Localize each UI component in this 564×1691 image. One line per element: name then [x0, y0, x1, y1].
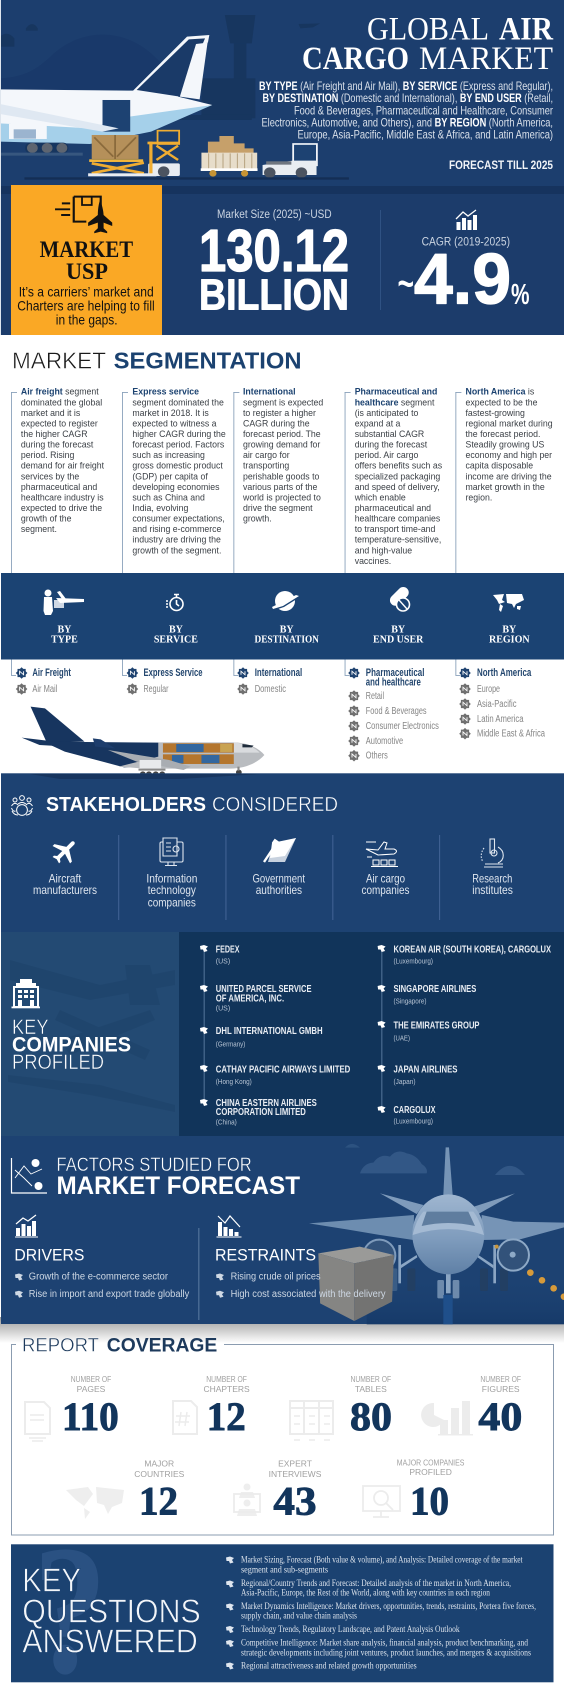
text: express service: Express service: [132, 387, 199, 397]
text: pharmaceutical and healthcare: healthcare: [355, 397, 399, 407]
stat labels row 1: PAGES: [77, 1384, 106, 1394]
panel: key questions answered: [11, 1508, 554, 1691]
faded icons row 2: [66, 1484, 257, 1519]
labels: stakeholders: institutes: [472, 883, 513, 897]
list: by end user: Others: [366, 751, 388, 762]
icon: air cargo: [366, 842, 398, 866]
text: air freight: expected to drive the: [21, 503, 102, 513]
list: by end user: Consumer Electronics: [366, 721, 439, 732]
list: by region: Europe: [477, 684, 500, 695]
stat: market size: BILLION: [199, 270, 349, 320]
stat numbers row 1: [62, 1394, 522, 1439]
text: market USP: Charters are helping to fill: [17, 298, 155, 314]
labels: stakeholders: Research: [472, 872, 512, 886]
panel: segmentation text: [21, 387, 553, 566]
list: companies column 2: CARGOLUX: [394, 1105, 436, 1116]
text: international: growing demand for: [243, 440, 320, 450]
text: pharmaceutical and healthcare: and speed of delivery,: [355, 482, 440, 492]
labels: stakeholders: Air cargo: [366, 872, 405, 886]
list: by type: [16, 667, 71, 695]
panel: segment categories band: [1, 573, 564, 660]
text: north america: North America: [466, 387, 526, 397]
labels: categories: REGION: [489, 634, 530, 645]
list: companies column 2: (UAE): [394, 1035, 410, 1042]
icon: government: [264, 838, 296, 862]
text: north america: market growth in the: [466, 482, 545, 492]
text: air freight: market and it is: [21, 408, 81, 418]
list: companies column 1: (Germany): [216, 1042, 245, 1049]
list: by end user: Food & Beverages: [366, 706, 427, 717]
labels: categories: BY: [169, 624, 184, 635]
heading: stakeholders: CONSIDERED: [212, 794, 338, 816]
stat labels row 2: MAJOR COMPANIES: [397, 1457, 465, 1467]
text: air freight: demand for air freight: [21, 461, 105, 471]
text: air freight: services by the: [21, 471, 79, 481]
list: companies column 2: (Luxembourg): [394, 1119, 433, 1126]
title: GLOBAL: [367, 12, 489, 48]
text: international: segment is expected: [243, 397, 323, 407]
heading: factors: FACTORS STUDIED FOR: [56, 1155, 252, 1176]
cargo loader: [88, 131, 180, 177]
labels: categories: DESTINATION: [254, 634, 320, 645]
labels: stakeholders: companies: [362, 883, 410, 897]
icon: parcel plane: [55, 197, 112, 233]
heading: stakeholders: [46, 794, 338, 816]
text: air freight: during the forecast: [21, 440, 94, 450]
heading: report coverage: COVERAGE: [107, 1336, 217, 1357]
text: north america: economy and high per: [466, 450, 552, 460]
list: companies column 1: [200, 944, 350, 1127]
panel: factors studied: [0, 1136, 564, 1343]
list: companies column 1: FEDEX: [216, 944, 240, 955]
heading: key questions: ANSWERED: [22, 1622, 198, 1659]
text: air freight: the higher CAGR: [21, 429, 88, 439]
text: pharmaceutical and healthcare: segment: [401, 397, 434, 407]
icon: stakeholders: [12, 796, 32, 815]
text: north america: expected to be the: [466, 397, 538, 407]
stat: CAGR: CAGR (2019-2025): [422, 237, 510, 249]
list: companies column 2: (Luxembourg): [394, 959, 433, 966]
heading: key companies: COMPANIES: [12, 1034, 131, 1057]
column: restraints: [215, 1216, 386, 1300]
labels: categories: [51, 624, 530, 645]
text: express service: (GDP) per capita of: [132, 471, 208, 481]
list: by region: Latin America: [477, 714, 524, 725]
list: companies column 1: CATHAY PACIFIC AIRWAYS LIMITED: [216, 1064, 350, 1075]
stat numbers row 1: 40: [478, 1394, 522, 1439]
panel: market USP: [11, 185, 162, 335]
text: north america: income are driving the: [466, 471, 552, 481]
list: companies column 1: OF AMERICA, INC.: [216, 994, 284, 1005]
labels: categories: END USER: [373, 634, 424, 645]
text: pharmaceutical and healthcare: expand at a: [355, 418, 401, 428]
heading: market segmentation: SEGMENTATION: [114, 347, 302, 373]
icon: forecast chart: [12, 1158, 47, 1193]
text: pharmaceutical and healthcare: Pharmaceutical and: [355, 387, 437, 397]
text: north america: the forecast period.: [466, 429, 540, 439]
list: by destination: [237, 667, 302, 695]
list: companies column 1: CORPORATION LIMITED: [216, 1107, 306, 1118]
heading: stakeholders: STAKEHOLDERS: [46, 794, 206, 816]
stat numbers row 1: 12: [207, 1394, 246, 1439]
title: [302, 12, 554, 77]
text: international: drive the segment: [243, 503, 313, 513]
list: questions: Technology Trends, Regulatory Landscape, and Patent Analysis Outlook: [241, 1625, 460, 1635]
stat labels row 2: PROFILED: [409, 1467, 452, 1477]
list: companies column 2: (Japan): [394, 1079, 416, 1086]
heading: market USP: [40, 237, 133, 284]
text: express service: such as increasing: [132, 450, 205, 460]
stat labels row 2: COUNTRIES: [134, 1469, 185, 1479]
list: by end user: Retail: [366, 691, 384, 702]
labels: stakeholders: manufacturers: [33, 883, 97, 897]
icon: restraints: [216, 1216, 242, 1238]
text: pharmaceutical and healthcare: vaccines.: [355, 556, 391, 566]
icon: by type: [44, 590, 84, 615]
stat labels row 2: [134, 1457, 465, 1479]
text: express service: and rising e-commerce: [132, 524, 222, 534]
text: north america: fastest-growing: [466, 408, 525, 418]
text: pharmaceutical and healthcare: specialized packaging: [355, 471, 440, 481]
list: by type: Air Freight: [32, 667, 71, 679]
illustration: cargo plane side view: [22, 707, 264, 777]
icon: by region: [493, 594, 524, 612]
list: companies column 2: [378, 944, 551, 1126]
text: north america: is: [528, 387, 534, 397]
text: international: transporting: [243, 461, 289, 471]
text: international: various parts of the: [243, 482, 318, 492]
text: express service: higher CAGR during the: [132, 429, 226, 439]
list: companies column 1: (US): [216, 1006, 230, 1013]
text: air freight: dominated the global: [21, 397, 102, 407]
heading: key questions: KEY: [22, 1562, 81, 1599]
list: questions: [226, 1555, 536, 1672]
text: pharmaceutical and healthcare: to transport time-and: [355, 524, 436, 534]
labels: categories: BY: [57, 624, 72, 635]
stat: market size: [199, 209, 349, 320]
heading: market USP: USP: [66, 259, 108, 284]
list: by end user: and healthcare: [366, 677, 421, 689]
list: by region: North America: [477, 667, 532, 679]
panel: report coverage: [12, 1336, 554, 1535]
heading: report coverage: [22, 1336, 217, 1357]
text: international: world is projected to: [242, 492, 321, 502]
text: pharmaceutical and healthcare: and high-value: [355, 545, 412, 555]
text: air freight: growth of the: [21, 514, 72, 524]
text: express service: India, evolving: [132, 503, 188, 513]
list: by service: [127, 667, 202, 695]
text: pharmaceutical and healthcare: offers benefits such as: [355, 461, 443, 471]
text: north america: region.: [466, 492, 492, 502]
list: by service: Express Service: [144, 667, 202, 679]
text: express service: expected to witness a: [132, 418, 217, 428]
text: international: to register a higher: [243, 408, 316, 418]
icon: by service: [166, 594, 183, 610]
list: companies column 1: (Hong Kong): [216, 1079, 252, 1086]
column: restraints: RESTRAINTS: [215, 1247, 316, 1265]
list: by end user: Pharmaceutical: [366, 667, 424, 679]
stat numbers row 2: 10: [410, 1478, 449, 1523]
list: questions: supply chain, and value chain analysis: [241, 1611, 357, 1621]
labels: stakeholders: technology: [148, 883, 196, 897]
stat: market size: 130.12: [199, 218, 349, 284]
icon: growth chart: [456, 210, 477, 230]
icon: by end user: [388, 585, 411, 611]
icon: drivers: [15, 1215, 38, 1238]
stat: CAGR: %: [511, 279, 530, 311]
column: restraints: Rising crude oil prices: [231, 1271, 321, 1282]
text: international: forecast period. The: [243, 429, 321, 439]
heading: market segmentation: MARKET: [12, 347, 106, 373]
column: drivers: Rise in import and export trade globally: [29, 1289, 189, 1300]
illustration: cardboard box: [318, 1247, 394, 1321]
stat: market size: Market Size (2025) ~USD: [217, 209, 332, 221]
list: by end user: Automotive: [366, 736, 404, 747]
heading: factors: MARKET FORECAST: [56, 1172, 300, 1200]
text: air freight: period. Rising: [21, 450, 75, 460]
stat labels row 1: [71, 1374, 521, 1394]
column: drivers: [14, 1215, 189, 1300]
stat labels row 1: NUMBER OF: [480, 1374, 521, 1384]
text: air freight: healthcare industry is: [21, 492, 104, 502]
stat labels row 1: NUMBER OF: [206, 1374, 247, 1384]
text: air freight: segment.: [21, 524, 57, 534]
labels: stakeholders: authorities: [256, 883, 302, 897]
text: north america: Steadily growing US: [466, 440, 544, 450]
text: market USP: in the gaps.: [56, 311, 118, 327]
stat labels row 2: INTERVIEWS: [269, 1469, 322, 1479]
labels: stakeholders: Aircraft: [49, 872, 82, 886]
stat labels row 1: TABLES: [355, 1384, 387, 1394]
heading: key companies: [12, 1016, 131, 1074]
faded icons row 1: [25, 1401, 333, 1441]
list: companies column 1: DHL INTERNATIONAL GMBH: [216, 1026, 323, 1037]
title: AIR: [499, 12, 554, 48]
labels: stakeholders: Government: [252, 872, 306, 886]
panel: header: [0, 0, 564, 186]
stat numbers row 2: 12: [139, 1478, 178, 1523]
labels: categories: SERVICE: [154, 634, 198, 645]
text: pharmaceutical and healthcare: pharmaceutical and: [355, 503, 431, 513]
list: by end user: [348, 667, 439, 762]
stat numbers row 1: 110: [62, 1394, 119, 1439]
text: air freight: pharmaceutical and: [21, 482, 97, 492]
text: north america: capita disposable: [466, 461, 533, 471]
labels: stakeholders: companies: [148, 895, 196, 909]
text: international: perishable goods to: [243, 471, 320, 481]
icon: by destination: [272, 591, 300, 611]
text: express service: such as China and: [132, 492, 205, 502]
text: pharmaceutical and healthcare: which enable: [354, 492, 406, 502]
list: by region: Asia-Pacific: [477, 699, 516, 710]
stat numbers row 1: 80: [350, 1394, 392, 1439]
stat: CAGR: ~: [398, 262, 414, 306]
list: companies column 1: CHINA EASTERN AIRLINES: [216, 1098, 317, 1109]
list: companies column 2: JAPAN AIRLINES: [394, 1064, 458, 1075]
text: market USP: [17, 284, 155, 327]
list: companies column 1: (US): [216, 959, 230, 966]
text: international: growth.: [243, 514, 272, 524]
stat labels row 1: FIGURES: [482, 1384, 520, 1394]
list: companies column 2: THE EMIRATES GROUP: [394, 1020, 480, 1031]
list: questions: Asia-Pacific, Europe, the Rest of the World, along with key countries in each region: [241, 1587, 490, 1598]
title: MARKET: [419, 41, 553, 77]
list: by type: Air Mail: [32, 684, 57, 695]
text: express service: segment dominated the: [132, 397, 224, 407]
text: pharmaceutical and healthcare: healthcare companies: [355, 514, 441, 524]
panel: stakeholders considered: [1, 773, 564, 932]
cargo plane rear: [0, 35, 212, 156]
text: express service: growth of the segment.: [132, 545, 221, 555]
stat: CAGR: 4.9: [414, 240, 511, 320]
heading: key questions: QUESTIONS: [22, 1592, 201, 1629]
list: companies column 1: (China): [216, 1120, 237, 1127]
text: pharmaceutical and healthcare: temperature-sensitive,: [355, 535, 441, 545]
labels: categories: BY: [280, 624, 294, 635]
column rules: [11, 392, 461, 676]
title: CARGO: [302, 41, 409, 77]
text: express service: market in 2018. It is: [132, 408, 209, 418]
stat numbers row 2: [139, 1478, 449, 1523]
panel: key companies profiled: [1, 932, 564, 1136]
text: pharmaceutical and healthcare: substantial CAGR: [355, 429, 424, 439]
text: international: International: [243, 387, 296, 397]
stat labels row 1: NUMBER OF: [71, 1374, 111, 1384]
text: pharmaceutical and healthcare: during the forecast: [355, 440, 428, 450]
labels: categories: BY: [502, 624, 517, 635]
icon: information technology: [160, 838, 183, 866]
illustration: front view plane: [309, 1144, 564, 1324]
list: by destination: International: [255, 667, 302, 679]
subtitle: BY DESTINATION (Domestic and International), BY END USER (Retail,: [262, 91, 553, 105]
text: market USP: It’s a carriers’ market and: [19, 284, 154, 300]
text: pharmaceutical and healthcare: (is anticipated to: [355, 408, 419, 418]
heading: key companies: PROFILED: [12, 1051, 104, 1074]
text: air freight: Air freight: [21, 387, 63, 397]
column: drivers: DRIVERS: [14, 1247, 85, 1265]
icon: building: [12, 979, 40, 1008]
heading: factors: [56, 1155, 300, 1200]
text: express service: forecast period. Factors: [132, 440, 225, 450]
list: by destination: Domestic: [255, 684, 286, 695]
faded loader photo: [8, 960, 175, 1112]
text: north america: regional market during: [466, 418, 553, 428]
labels: stakeholders: [33, 872, 513, 909]
text: express service: gross domestic product: [132, 461, 223, 471]
labels: stakeholders: Information: [146, 872, 197, 886]
column: drivers: Growth of the e-commerce sector: [29, 1271, 169, 1282]
heading: market USP: MARKET: [40, 237, 133, 262]
list: by service: Regular: [144, 684, 169, 695]
text: air freight: segment: [65, 387, 99, 397]
heading: key companies: KEY: [12, 1016, 48, 1039]
list: companies column 2: (Singapore): [394, 999, 426, 1006]
text: express service: industry are driving the: [132, 535, 221, 545]
heading: key questions: [22, 1562, 201, 1659]
text: pharmaceutical and healthcare: period. Air cargo: [355, 450, 419, 460]
airport silhouette: [0, 15, 320, 120]
panel: key stats band: [0, 0, 564, 335]
stat numbers row 2: 43: [273, 1478, 316, 1523]
labels: categories: TYPE: [51, 634, 78, 645]
stat labels row 2: EXPERT: [278, 1459, 312, 1469]
text: express service: consumer expectations,: [132, 514, 225, 524]
list: companies column 1: UNITED PARCEL SERVICE: [216, 984, 312, 995]
heading: market segmentation: [12, 347, 302, 373]
stat labels row 2: MAJOR: [144, 1459, 174, 1469]
list: questions: segment and sub-segments: [241, 1565, 328, 1575]
heading: report coverage: REPORT: [22, 1336, 99, 1357]
stat labels row 1: CHAPTERS: [203, 1384, 250, 1394]
stat: CAGR: [398, 210, 530, 320]
list: questions: Regional attractiveness and related growth opportunities: [241, 1662, 417, 1672]
text: international: CAGR during the: [243, 418, 310, 428]
text: air freight: expected to register: [21, 418, 98, 428]
column: restraints: High cost associated with the delivery: [231, 1289, 386, 1300]
text: international: air cargo for: [243, 450, 290, 460]
text: express service: developing economies: [132, 482, 220, 492]
list: companies column 2: SINGAPORE AIRLINES: [394, 984, 476, 995]
icon: aircraft: [47, 833, 83, 869]
baggage trolley and tug: [24, 136, 349, 180]
list: by region: Middle East & Africa: [477, 729, 545, 740]
icon: research: [481, 839, 503, 867]
subtitle: [259, 79, 553, 142]
subtitle: Electronics, Automotive, and Others), and BY REGION (North America,: [262, 116, 553, 130]
stat labels row 1: NUMBER OF: [350, 1374, 391, 1384]
list: by region: [459, 667, 545, 740]
labels: categories: BY: [391, 624, 406, 635]
